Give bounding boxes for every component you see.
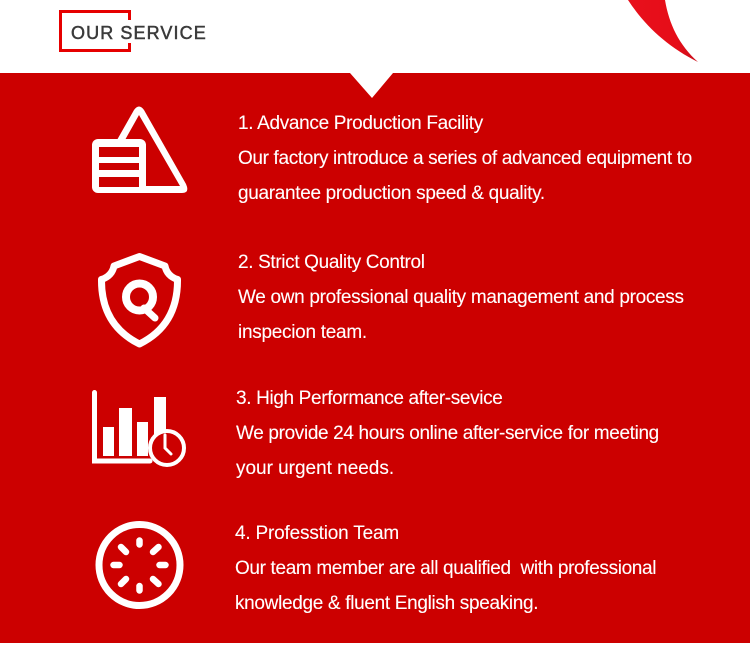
decorative red swoosh bbox=[628, 0, 698, 62]
heading: our service: OUR SERVICE bbox=[71, 23, 207, 43]
text: high performance after-service: 3. High Performance after-sevice We provide 24 hours online after-service for meeting your urgent needs. bbox=[236, 388, 659, 479]
text: profession team: 4. Professtion Team Our team member are all qualified with professional knowledge & fluent English speaking. bbox=[235, 523, 656, 614]
text: advance production facility: 1. Advance Production Facility Our factory introduce a series of advanced equipment to guarantee production speed & quality. bbox=[238, 113, 692, 204]
text: strict quality control: 2. Strict Quality Control We own professional quality management and process inspecion team. bbox=[238, 252, 684, 343]
heading: our service bbox=[59, 10, 207, 52]
panel notch bbox=[350, 73, 393, 98]
